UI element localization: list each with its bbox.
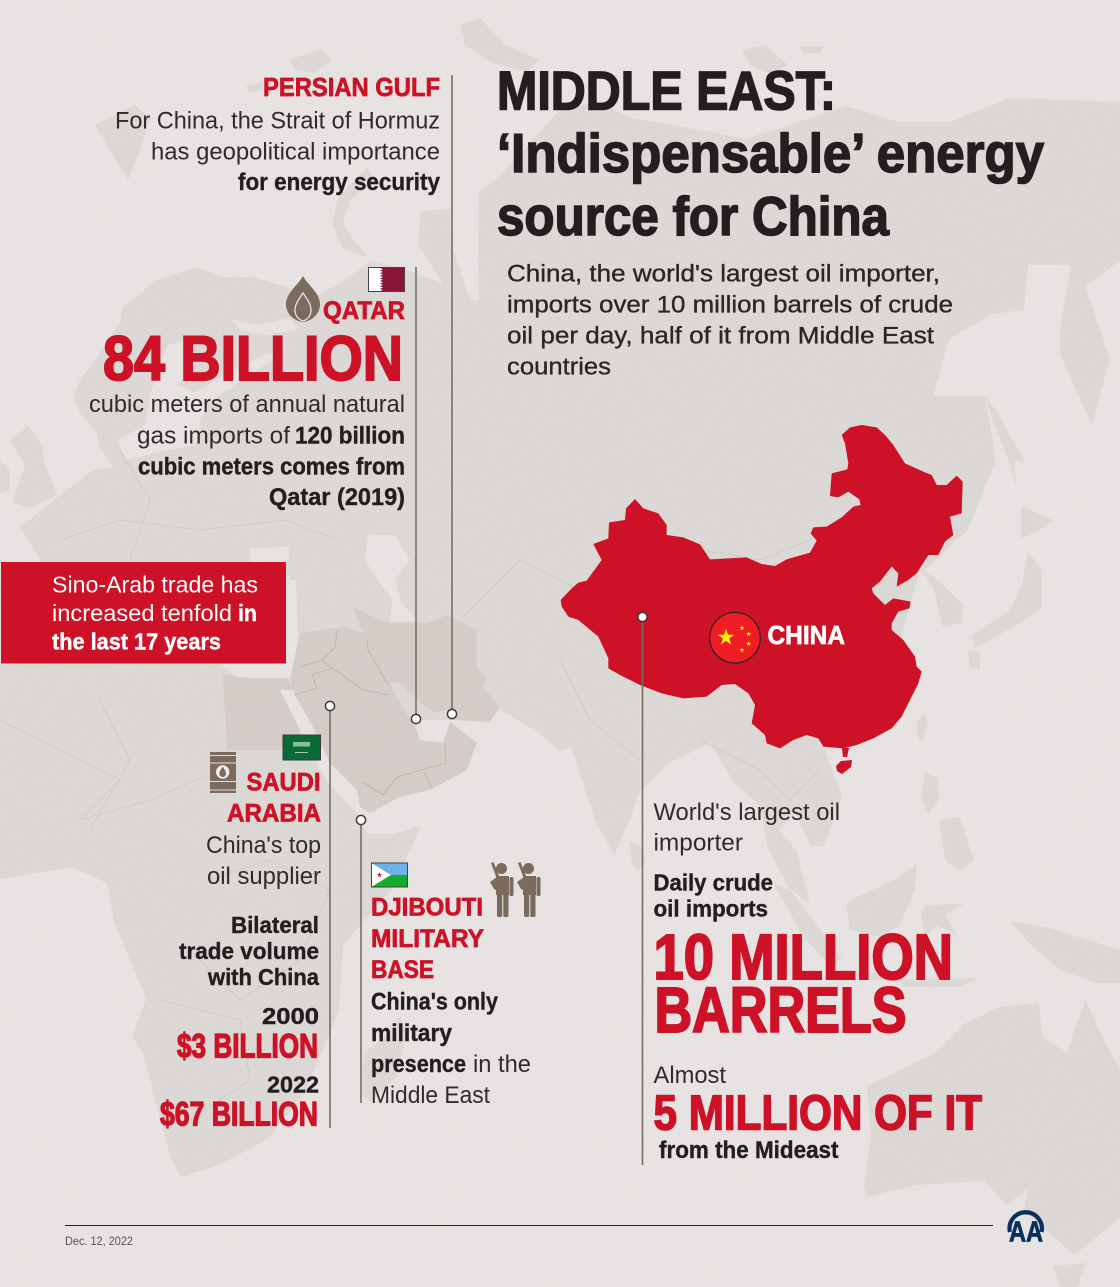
Qatar label: QATAR (323, 297, 405, 325)
trade figures 2022 (160, 1072, 319, 1134)
callout: Sino-Arab trade: Sino-Arab trade has (52, 572, 258, 598)
icon: China flag badge (710, 612, 760, 663)
Qatar description: Qatar (2019) (269, 484, 405, 511)
panel: Saudi Arabia (160, 735, 321, 1134)
Saudi Arabia label: ARABIA (227, 800, 321, 828)
China description (654, 799, 840, 856)
trade figures 2000: $3 BILLION (177, 1028, 318, 1066)
panel: Persian Gulf: For China, the Strait of Hormuz (115, 108, 440, 134)
trade figures 2000 (177, 1003, 319, 1066)
figure: 10 million barrels (654, 921, 953, 1046)
bilateral trade volume: Bilateral (231, 912, 319, 938)
Djibouti description (371, 988, 531, 1109)
trade figures 2022: 2022 (267, 1072, 319, 1098)
title: ‘Indispensable’ energy (497, 122, 1044, 184)
callout: Sino-Arab trade (1, 562, 286, 664)
bilateral trade volume: with China (207, 964, 319, 990)
Saudi Arabia label (227, 768, 321, 828)
China label: CHINA (768, 620, 845, 650)
daily crude oil imports label: oil imports (654, 896, 768, 922)
Qatar description: cubic meters of annual natural (89, 391, 405, 418)
panel: Persian Gulf: PERSIAN GULF (263, 74, 440, 102)
almost label: Almost (654, 1062, 726, 1089)
title: MIDDLE EAST: (497, 60, 836, 122)
panel: Persian Gulf (115, 74, 441, 196)
callout: Sino-Arab trade: increased tenfold (52, 600, 232, 626)
figure: 10 million barrels: BARRELS (654, 974, 906, 1046)
Djibouti label: MILITARY (371, 925, 484, 953)
logo: Anadolu Agency: AA (1009, 1216, 1043, 1248)
Djibouti description: presence (371, 1051, 466, 1078)
figure: 84 billion: 84 BILLION (103, 324, 403, 394)
daily crude oil imports label: Daily crude (654, 870, 773, 896)
Qatar description: gas imports of (137, 422, 290, 450)
Djibouti description: Middle East (371, 1082, 490, 1109)
Qatar description: cubic meters comes from (138, 454, 405, 480)
panel: Persian Gulf: for energy security (238, 169, 441, 196)
Saudi Arabia label: SAUDI (246, 768, 320, 796)
intro text: imports over 10 million barrels of crude (507, 292, 953, 318)
panel: Persian Gulf: has geopolitical importance (151, 138, 440, 166)
icon: Saudi flag (283, 735, 320, 760)
China description: importer (654, 830, 743, 856)
icon: gas flame (286, 276, 320, 322)
title: source for China (497, 185, 889, 247)
icon: Qatar flag (368, 267, 405, 292)
from the Mideast: from the Mideast (659, 1137, 838, 1164)
figure: 10 million barrels: 10 MILLION (654, 921, 953, 993)
intro text: countries (507, 354, 611, 380)
middle east highlighted countries (223, 607, 500, 813)
map of China (561, 425, 963, 774)
panel: China imports (654, 799, 982, 1164)
trade figures 2000: 2000 (262, 1003, 319, 1029)
callout: Sino-Arab trade: the last 17 years (52, 628, 221, 654)
date: Dec. 12, 2022 (65, 1236, 133, 1248)
Djibouti label: DJIBOUTI (371, 894, 483, 922)
bilateral trade volume: trade volume (179, 938, 319, 964)
footer rule (65, 1224, 993, 1226)
panel: Qatar (89, 267, 405, 511)
Saudi description (206, 832, 321, 890)
Qatar description: 120 billion (295, 422, 405, 450)
intro text: China, the world's largest oil importer, (507, 260, 940, 288)
leader lines and map pins (325, 75, 647, 1165)
title (497, 60, 1044, 247)
Djibouti description: China's only (371, 988, 499, 1016)
Djibouti label (371, 894, 484, 984)
Saudi description: oil supplier (207, 863, 321, 890)
Djibouti label: BASE (371, 956, 434, 984)
China description: World's largest oil (654, 799, 840, 826)
icon: Djibouti flag (371, 862, 408, 888)
panel: Djibouti military base (371, 862, 540, 1109)
callout: Sino-Arab trade: in (238, 600, 257, 626)
icon: oil barrel (209, 752, 236, 793)
icon: soldiers (490, 862, 540, 917)
Qatar description (89, 391, 405, 511)
intro text: oil per day, half of it from Middle East (507, 322, 934, 350)
intro text (507, 260, 953, 380)
Djibouti description: in the (473, 1051, 531, 1078)
daily crude oil imports label (654, 870, 773, 922)
bilateral trade volume (179, 912, 319, 990)
trade figures 2022: $67 BILLION (160, 1096, 318, 1134)
figure: 5 million of it: 5 MILLION OF IT (654, 1086, 982, 1140)
Saudi description: China's top (206, 832, 321, 859)
Djibouti description: military (371, 1020, 453, 1047)
